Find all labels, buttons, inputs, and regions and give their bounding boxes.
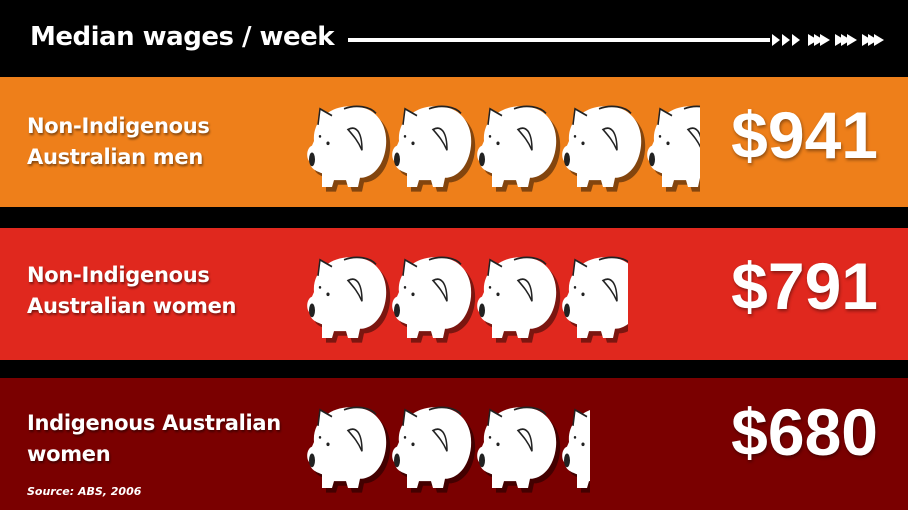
icons: piggy banks	[307, 406, 590, 493]
header	[0, 0, 908, 77]
title: Median wages / week	[30, 22, 334, 52]
label: women	[27, 442, 110, 466]
value: $680	[731, 395, 878, 469]
value: $941	[731, 98, 878, 172]
label: Australian women	[27, 294, 236, 318]
label: Australian men	[27, 145, 203, 169]
label: Indigenous Australian	[27, 411, 281, 435]
label: Non-Indigenous	[27, 114, 210, 138]
label	[27, 114, 211, 169]
label	[27, 411, 282, 466]
panel: indigenous women	[0, 378, 908, 510]
source: Source: ABS, 2006	[27, 485, 141, 498]
panel: non-indigenous women	[0, 228, 908, 360]
icons: piggy banks	[307, 106, 700, 192]
icons: piggy banks	[307, 256, 628, 343]
value: $791	[731, 249, 878, 323]
label: Non-Indigenous	[27, 263, 210, 287]
label	[27, 263, 238, 318]
panel: non-indigenous men	[0, 77, 908, 207]
arrow	[348, 34, 884, 46]
